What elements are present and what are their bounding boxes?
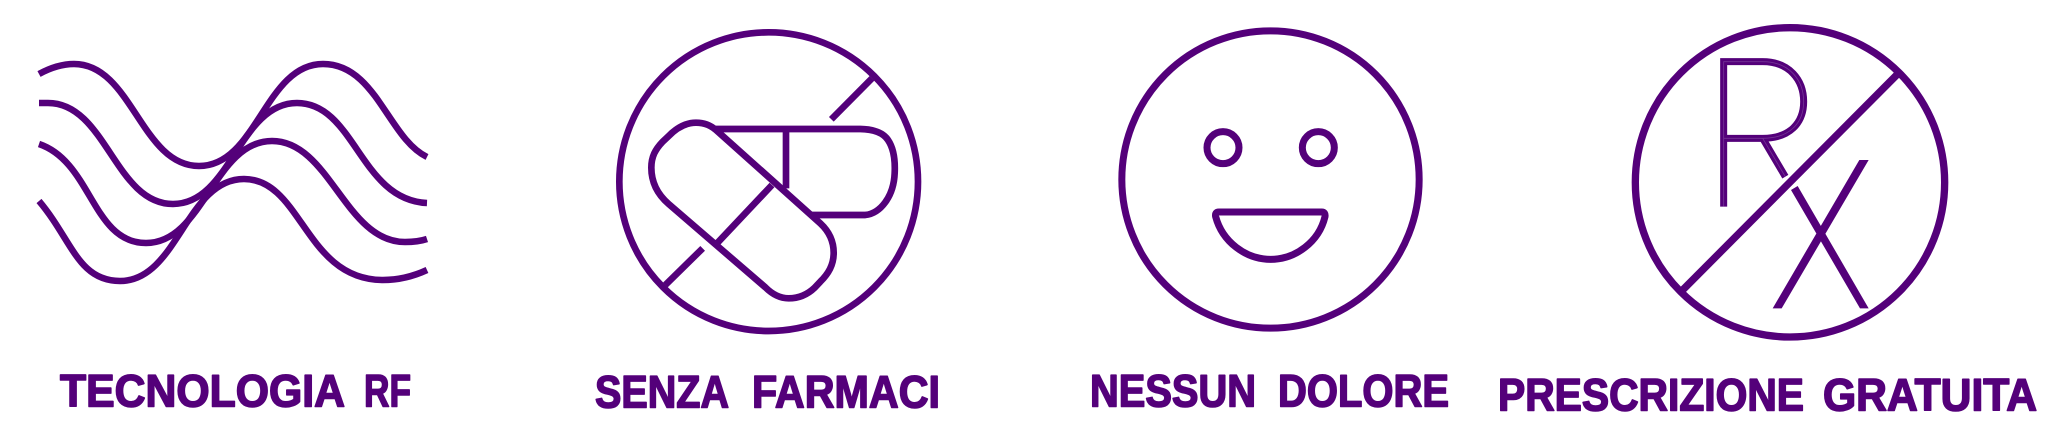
label: tecnologia RF: RF bbox=[364, 366, 411, 416]
icon: smiling face bbox=[1122, 31, 1419, 328]
slash bbox=[1683, 74, 1898, 290]
panel: nessun dolore bbox=[1090, 31, 1449, 416]
wave 2 bbox=[39, 103, 427, 204]
rear capsule bbox=[716, 129, 895, 215]
slash top segment bbox=[831, 78, 872, 119]
icon: crossed-out Rx bbox=[1635, 28, 1945, 337]
wave 4 bbox=[39, 179, 427, 281]
label: senza farmaci: SENZA bbox=[595, 366, 729, 418]
rear capsule divider bbox=[776, 130, 796, 188]
icon: crossed-out pills bbox=[619, 32, 918, 331]
letter X bbox=[1773, 160, 1869, 308]
label: prescrizione gratuita bbox=[1498, 370, 2037, 420]
capsule divider bbox=[717, 185, 772, 243]
R inner highlight bbox=[1724, 62, 1804, 207]
panel: prescrizione gratuita bbox=[1498, 28, 2037, 421]
right eye bbox=[1302, 132, 1334, 164]
outer circle bbox=[619, 32, 918, 331]
label: tecnologia RF: TECNOLOGIA bbox=[60, 366, 345, 416]
face outline bbox=[1122, 31, 1419, 328]
letter R bbox=[1724, 62, 1804, 207]
diagonal capsule bbox=[651, 123, 834, 298]
label: senza farmaci bbox=[595, 366, 940, 418]
wave 1 bbox=[39, 64, 427, 166]
label: prescrizione gratuita: PRESCRIZIONE bbox=[1498, 370, 1804, 420]
icon: radio frequency waves bbox=[39, 64, 427, 281]
panel: senza farmaci bbox=[595, 32, 940, 418]
outer circle bbox=[1635, 28, 1945, 337]
smile bbox=[1215, 212, 1325, 259]
label: nessun dolore: DOLORE bbox=[1278, 366, 1449, 416]
wave 3 bbox=[39, 141, 427, 243]
label: senza farmaci: FARMACI bbox=[752, 366, 940, 418]
label: prescrizione gratuita: GRATUITA bbox=[1823, 370, 2037, 420]
slash bottom segment bbox=[665, 248, 703, 285]
panel: tecnologia RF bbox=[39, 64, 427, 416]
label: nessun dolore: NESSUN bbox=[1090, 366, 1256, 416]
label: nessun dolore bbox=[1090, 366, 1449, 416]
left eye bbox=[1207, 132, 1239, 164]
